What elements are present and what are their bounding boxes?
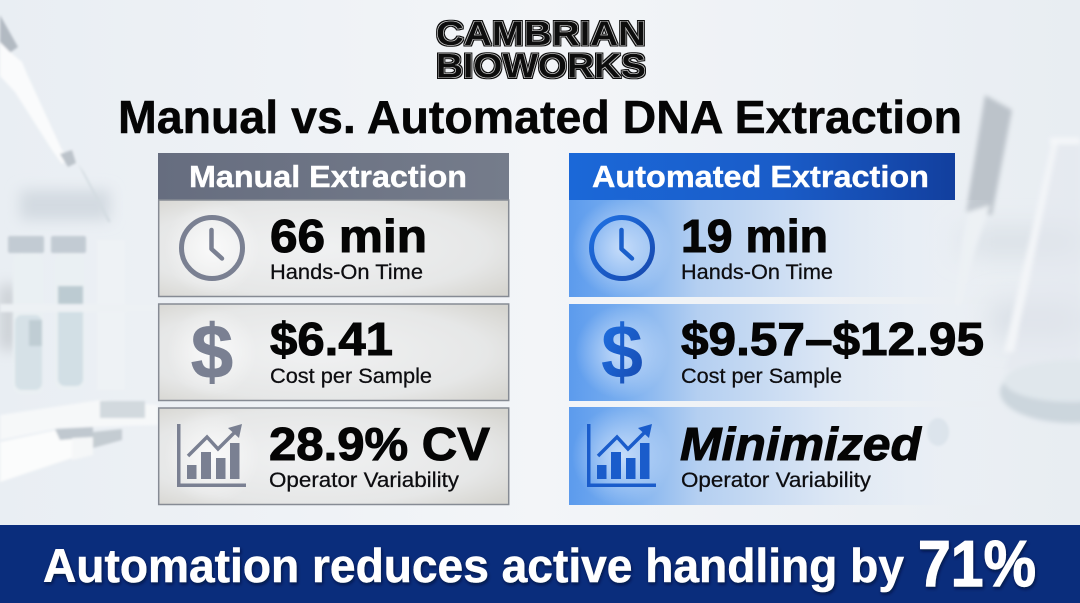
automated header: Automated Extraction [592, 159, 929, 194]
logo [436, 15, 646, 86]
logo: BIOWORKS [436, 48, 646, 86]
logo: CAMBRIAN [436, 15, 646, 53]
value: price range: $9.57–$12.95 [681, 313, 984, 365]
value: Minimized: Minimized [680, 418, 922, 470]
label: Operator Variability [269, 469, 460, 492]
icon: dollar: $ [601, 310, 643, 395]
icon: clock [182, 218, 242, 278]
bottom banner [0, 525, 1080, 603]
banner figure: 71%: 71% [918, 527, 1036, 600]
right pipette [956, 95, 1012, 305]
value: 66 min: 66 min [270, 210, 427, 262]
automated row: cost [569, 304, 999, 401]
value: $6.41: $6.41 [270, 313, 393, 365]
manual header [158, 153, 509, 200]
manual row: cost [159, 304, 509, 400]
panel: automated extraction [569, 153, 999, 506]
icon: dollar: $ [191, 310, 233, 395]
value: 19 min: 19 min [681, 210, 828, 262]
test tubes in rack [0, 236, 158, 394]
manual row: variability [159, 408, 509, 504]
manual header: Manual Extraction [189, 159, 467, 194]
automated row: hands-on time [569, 198, 999, 298]
automated row: variability [569, 406, 999, 506]
label: Hands-On Time [270, 261, 423, 284]
foreground lab tools left [0, 400, 158, 482]
label: Cost per Sample [681, 365, 842, 388]
label: Hands-On Time [681, 261, 833, 284]
label: Operator Variability [681, 469, 872, 492]
icon: chart [587, 424, 656, 487]
label: Cost per Sample [270, 365, 432, 388]
icon: clock [592, 218, 652, 278]
left pipette [0, 15, 111, 222]
automated header [569, 153, 955, 200]
title: Manual vs. Automated DNA Extraction [118, 91, 962, 143]
flask [1000, 138, 1080, 423]
value: 28.9% CV: 28.9% CV [269, 418, 490, 470]
small dish [927, 418, 949, 446]
panel: manual extraction [158, 153, 509, 504]
banner text: Automation reduces active handling by [43, 539, 904, 592]
manual row: hands-on time [159, 200, 509, 296]
icon: chart [177, 424, 246, 487]
